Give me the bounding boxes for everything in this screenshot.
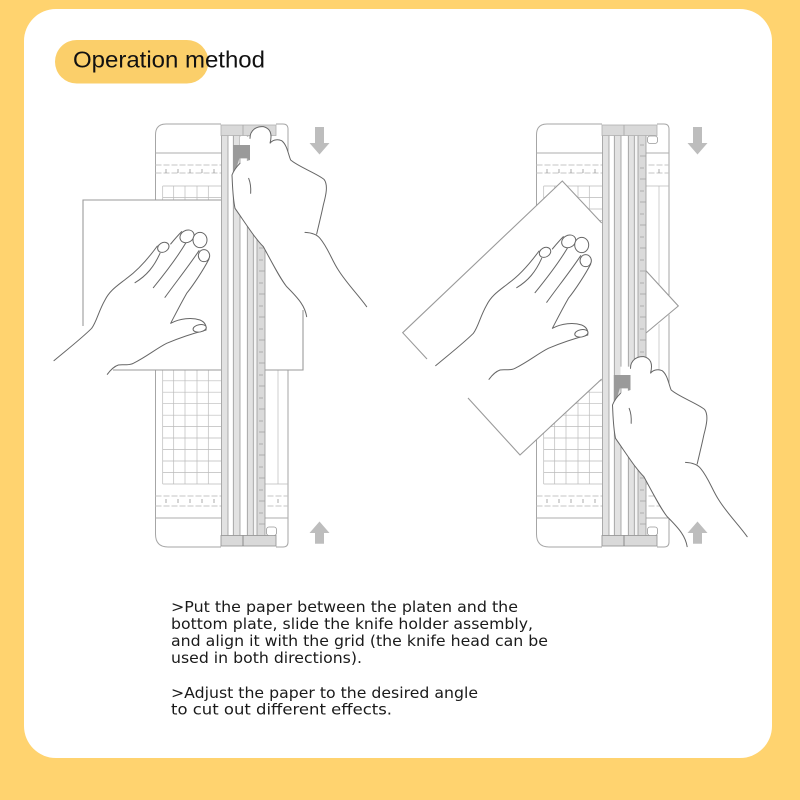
right hand sliding knife holder [612,357,747,547]
instruction text block one: >Put the paper between the platen and the [171,598,518,616]
instruction text block one [171,598,548,667]
left illustration: straight cut [54,124,367,547]
instruction text block one: and align it with the grid (the knife head can be [171,632,548,650]
right flat hand holding paper [436,232,591,379]
right arrow pointing up [688,522,708,544]
heading: Operation method: Operation method [73,46,265,72]
right top knob [648,136,658,144]
heading: Operation method [55,40,265,84]
instruction text block two: to cut out different effects. [171,700,392,718]
instruction text block one: bottom plate, slide the knife holder assembly, [171,615,533,633]
left arrow pointing down [310,127,330,154]
right cutter rail and end caps [602,125,658,546]
left arrow pointing up [310,522,330,544]
instruction text block two: >Adjust the paper to the desired angle [171,684,478,702]
right arrow pointing down [688,127,708,154]
right illustration: angled cut [403,124,747,547]
instruction text block one: used in both directions). [171,649,362,667]
right cutter base with cutting grid [536,124,669,547]
left cutter rail and end caps [221,125,276,546]
right rotated sheet of paper [403,181,678,455]
left flat hand holding paper [54,227,210,374]
left sheet of paper [83,200,303,370]
instruction text block two [171,684,478,718]
left cutter base with cutting grid [156,124,288,547]
left hand sliding knife holder [232,127,367,317]
